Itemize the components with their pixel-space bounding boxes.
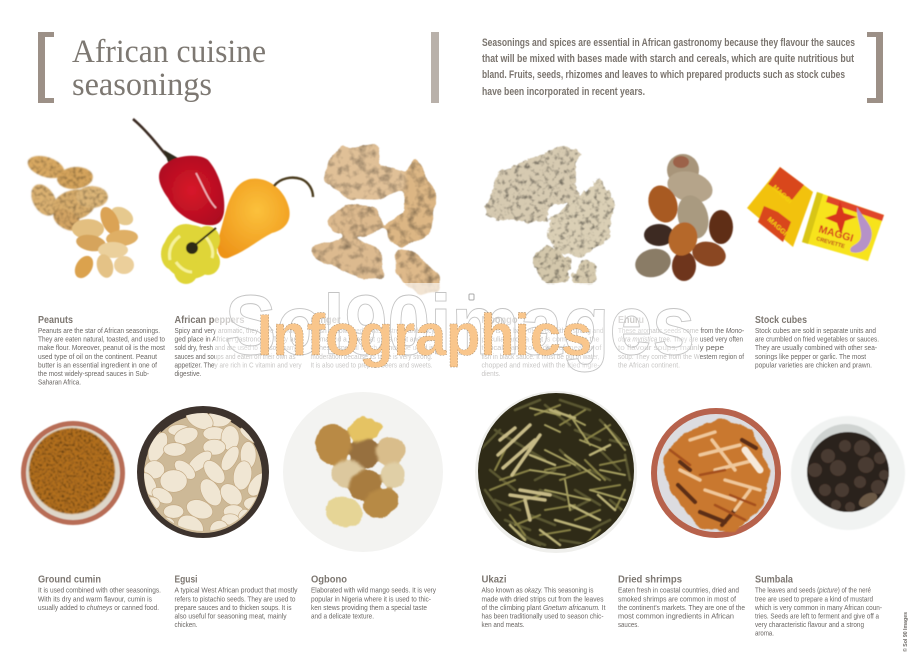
text: Stock cubes: Stock cubes	[755, 314, 807, 326]
text: Sumbala: very characteristic flavour and a strong	[755, 622, 864, 629]
text: Peanuts: butter is an essential ingredient in one of	[38, 362, 157, 369]
text: African peppers: sold dry, fresh and are used to season many	[174, 345, 297, 352]
text: Sumbala: The leaves and seeds (picture) of the neré	[755, 588, 871, 595]
text: Ogbono: Elaborated with wild mango seeds. It is very	[311, 588, 436, 595]
text: Egusi: prepare sauces and to thicken soups. It is	[174, 605, 292, 612]
text: Ehuru	[618, 314, 745, 369]
text: Egusi: also useful for seasoning meat, mainly	[174, 614, 287, 620]
image: ginger	[310, 143, 440, 297]
text: Sumbala: tries. Seeds are left to ferment and give off a	[755, 614, 879, 620]
text: Ukazi	[482, 573, 606, 629]
text: Peanuts: the most widely-spread sauces in Sub-	[38, 371, 150, 378]
image: nuts and seeds	[632, 154, 733, 281]
text: Ukazi: Ukazi	[482, 573, 507, 585]
text: Ehuru: the African continent.	[618, 362, 680, 369]
text: Ogbono: ken stews providing them a special taste	[311, 605, 427, 612]
text: Peanuts: used type of oil on the continent. Peanut	[38, 354, 157, 361]
text: Ukazi: has been traditionally used to season chic-	[482, 614, 604, 620]
text: Ginger: aroma and a taste that gives meat and fish	[310, 337, 433, 344]
text: Peanuts: They are eaten natural, toasted, and used to	[38, 337, 165, 344]
text: Ogbono: Ogbono	[311, 573, 347, 585]
text: Egusi	[174, 573, 298, 629]
title: seasonings	[72, 67, 212, 103]
text: Ginger: moderation because its taste is very strong.	[310, 354, 433, 361]
text: Ehuru: to flavour soups, mainly pepe	[618, 345, 724, 352]
text: African peppers	[174, 314, 302, 378]
text: Ogbono	[311, 573, 436, 620]
image: stock cubes: MAGGI	[766, 216, 788, 237]
text: Mbongo: fish in black sauce. It must be put in water,	[482, 354, 600, 361]
image: stock cubes: MAGGI	[771, 184, 793, 205]
text: Ehuru: These aromatic seeds come from the Mono-	[618, 328, 745, 335]
text: Stock cubes: They are usually combined with other sea-	[755, 345, 878, 352]
text: Dried shrimps: most common ingredients in African	[618, 614, 734, 620]
watermark: Sol90images: Sol90images	[225, 278, 695, 372]
left bracket	[38, 32, 54, 103]
text: Dried shrimps: Dried shrimps	[618, 573, 682, 585]
title: African cuisine	[72, 34, 266, 70]
text: Dried shrimps	[618, 573, 745, 629]
text: Ehuru: dora myristica tree. They are used very often	[618, 337, 743, 344]
text: Ground cumin: Ground cumin	[38, 573, 101, 585]
image: egusi bowl	[137, 404, 273, 542]
text: Mbongo: chopped and mixed with the fried ingre-	[482, 362, 600, 369]
text: Ginger: It is also used to prepare beers and sweets.	[310, 362, 433, 369]
image: ogbono plate	[283, 392, 443, 552]
text: Egusi: Egusi	[174, 573, 198, 585]
text: African peppers: digestive.	[174, 371, 202, 378]
text: Sumbala: Sumbala	[755, 573, 793, 585]
text: African peppers: appetizer. They are rich in C vitamin and very	[174, 362, 302, 369]
text: Ogbono: and a delicate texture.	[311, 614, 374, 620]
copyright credit: © Sol 90 Images	[902, 612, 909, 652]
text: African peppers: Spicy and very aromatic, they have a privile-	[174, 328, 300, 335]
text: Dried shrimps: Eaten fresh in coastal countries, dried and	[618, 588, 739, 595]
text: Peanuts: Saharan Africa.	[38, 380, 81, 387]
text: Ginger: Fresh or powdered, it has a strong and spicy	[310, 328, 435, 335]
text: Dried shrimps: sauces.	[618, 622, 639, 629]
image: ukazi bowl	[475, 391, 637, 553]
text: Stock cubes: are crumbled on fried vegetables or sauces.	[755, 337, 879, 344]
text: Egusi: A typical West African product that mostly	[174, 588, 298, 595]
text: Mbongo: dients.	[482, 371, 501, 378]
text: Mbongo: Mbongo	[482, 314, 518, 326]
image: stock cubes: MAGGI	[817, 223, 855, 245]
title	[72, 34, 266, 103]
text: Ogbono: popular in Nigeria where it is used to thic-	[311, 596, 432, 603]
intro text	[482, 37, 855, 98]
text: Ehuru: Ehuru	[618, 314, 644, 326]
text: Dried shrimps: the continent's markets. They are one of the	[618, 605, 745, 612]
text: Ground cumin: It is used combined with other seasonings.	[38, 588, 161, 595]
image: ground cumin bowl	[21, 421, 125, 525]
text: African peppers: African peppers	[174, 314, 245, 326]
text: Egusi: refers to pistachio seeds. They are used to	[174, 596, 296, 603]
image: sumbala bowl	[791, 416, 905, 530]
centre divider bar	[431, 32, 439, 103]
text: Ground cumin	[38, 573, 161, 612]
intro text: have been incorporated in recent years.	[482, 86, 645, 98]
image: peanuts	[25, 152, 139, 281]
text: Sumbala: tree are used to prepare a kind of mustard	[755, 596, 873, 603]
watermark veil	[215, 283, 700, 379]
image: rock-like seasoning	[484, 143, 615, 285]
watermark small square icon	[469, 294, 474, 300]
text: Ginger	[310, 314, 435, 369]
watermark: Infographics: Infographics	[257, 303, 592, 368]
text: Ground cumin: With its dry and warm flavour, cumin is	[38, 596, 152, 603]
text: Stock cubes: sonings like pepper or garlic. The most	[755, 354, 866, 361]
text: Ground cumin: usually added to chutneys or canned food.	[38, 605, 159, 612]
image: stock cubes: CREVETTE	[815, 236, 846, 250]
text: Mbongo: This is the bark of a tree with a strong and	[482, 328, 604, 335]
text: Mbongo: peculiar aroma that is common in the	[482, 337, 600, 344]
text: Ginger: dishes a special touch. It must be used in	[310, 345, 435, 352]
text: Egusi: chicken.	[174, 622, 198, 629]
image: dried shrimps bowl	[651, 408, 781, 538]
text: Ukazi: ken and meats.	[482, 622, 525, 629]
image: African peppers	[133, 119, 313, 284]
text: Ukazi: of the climbing plant Gnetum africanum. It	[482, 605, 606, 612]
text: Ukazi: Also known as okazy. This seasoning is	[482, 588, 594, 595]
text: Sumbala: which is very common in many African coun-	[754, 605, 883, 612]
text: Peanuts	[38, 314, 165, 387]
text: Peanuts: Peanuts are the star of African seasonings.	[38, 328, 160, 335]
right bracket	[867, 32, 883, 103]
text: African peppers: ged place in African gastronomy. They are	[174, 337, 300, 344]
image: stock cubes	[747, 167, 884, 261]
text: Mbongo	[482, 314, 604, 378]
text: Stock cubes: popular varieties are chicken and prawn.	[755, 362, 872, 369]
text: African peppers: sauces and soups and eaten on their own as	[174, 354, 296, 361]
text: Ginger: Ginger	[310, 314, 340, 326]
text: Dried shrimps: smoked shrimps are common in most of	[618, 596, 736, 603]
text: Sumbala: aroma.	[755, 631, 774, 638]
text: Ukazi: made with dried strips cut from the leaves	[482, 596, 604, 603]
text: Stock cubes	[755, 314, 879, 369]
text: Stock cubes: Stock cubes are sold in separate units and	[755, 328, 876, 335]
text: Mbongo: typical Cameroon dish of meat or of	[482, 345, 602, 352]
text: Peanuts: Peanuts	[38, 314, 73, 326]
text: Ehuru: soup. They come from the Western region of	[618, 354, 744, 361]
text: Peanuts: make flour. Moreover, peanut oil is the most	[38, 345, 165, 352]
text: Sumbala	[754, 573, 883, 638]
